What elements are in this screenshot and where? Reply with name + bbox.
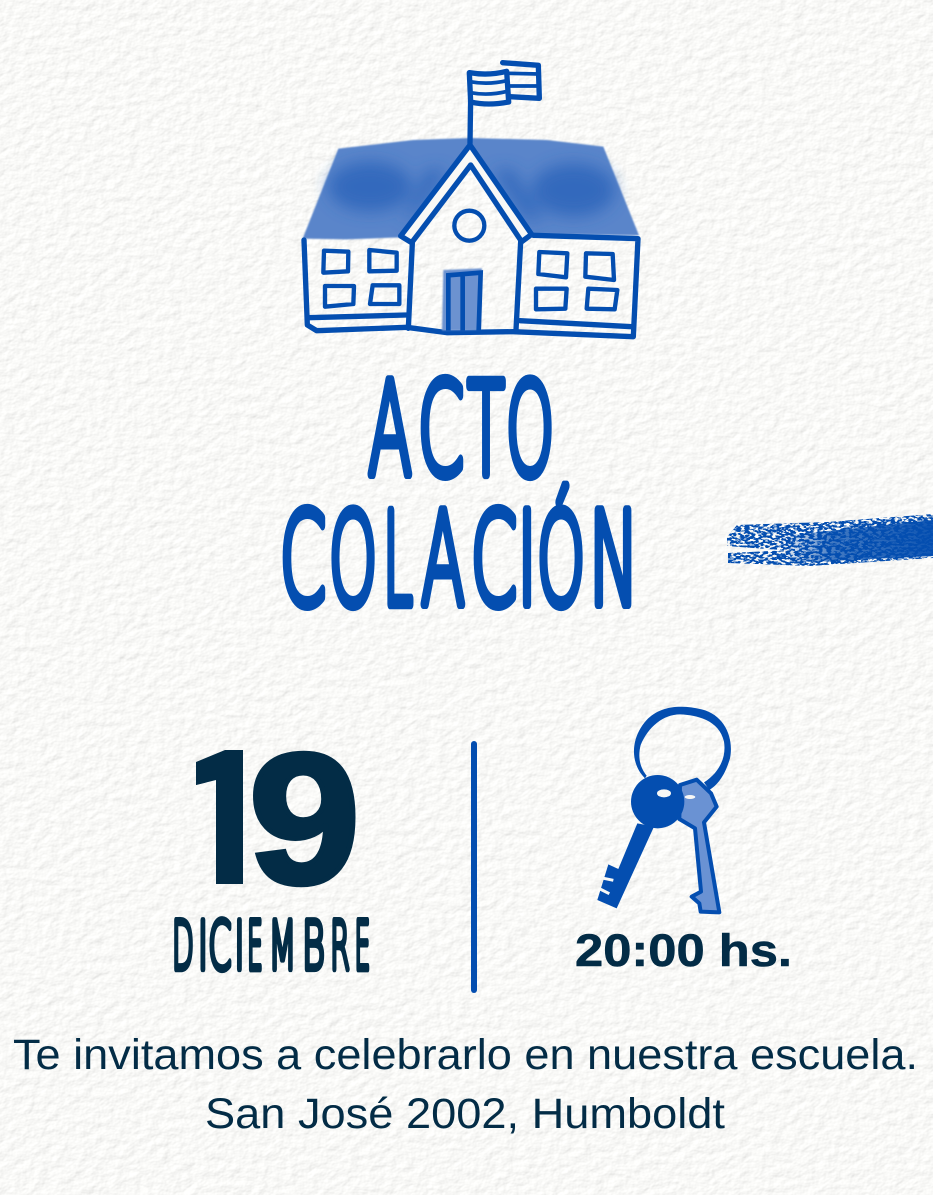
title line 2: O	[329, 485, 377, 635]
title line 1: A	[368, 355, 412, 504]
title line 2	[280, 485, 639, 635]
title line 2: N	[589, 486, 639, 635]
date month: D	[172, 908, 194, 986]
back key	[679, 780, 719, 912]
time: 20:00 hs.	[575, 925, 792, 976]
title line 1: T	[467, 355, 505, 505]
date month	[172, 906, 370, 986]
date month: I	[235, 908, 244, 985]
school door	[442, 268, 482, 331]
title line 2: I	[518, 485, 536, 634]
date number	[196, 750, 356, 888]
divider	[471, 741, 477, 993]
date month: R	[330, 908, 350, 986]
title line 1: C	[418, 356, 464, 505]
front key	[597, 775, 684, 908]
address: San José 2002, Humboldt	[205, 1090, 725, 1138]
date month: E	[355, 907, 370, 985]
title	[280, 355, 639, 635]
date number: 1	[173, 713, 279, 925]
date month: C	[208, 908, 232, 985]
date month: E	[247, 907, 263, 985]
date month: I	[198, 908, 208, 985]
title line 2: C	[280, 486, 326, 635]
invitation text: Te invitamos a celebrarlo en nuestra escuela.	[13, 1031, 918, 1079]
key ring	[634, 707, 731, 790]
brush stroke	[727, 514, 933, 566]
title line 2: A	[421, 485, 465, 634]
title line 2: C	[471, 486, 517, 635]
date month: B	[302, 906, 325, 985]
school outline	[304, 63, 638, 337]
illustration: school building with flag	[303, 63, 639, 337]
icon: keys	[597, 707, 731, 912]
title line 2: Ó	[537, 485, 585, 635]
date number: 9	[249, 716, 360, 923]
date month: M	[269, 908, 296, 986]
title line 1	[368, 355, 554, 505]
school roof wash	[303, 138, 639, 239]
title line 1: O	[506, 355, 554, 505]
title line 2: L	[383, 487, 413, 635]
